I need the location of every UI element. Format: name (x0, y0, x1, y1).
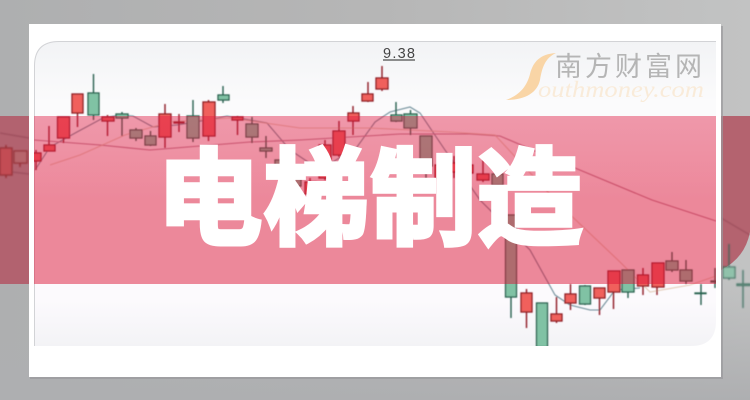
logo domain: outhmoney.com (538, 77, 704, 102)
outer left band segment (0, 116, 29, 284)
high price label: 9.38 (383, 46, 415, 62)
logo S swoosh (506, 53, 556, 100)
outer candles (0, 133, 750, 308)
watermark logo (506, 52, 705, 102)
pink title band (34, 116, 716, 284)
candlestick chart (30, 66, 716, 347)
outer right band segment (721, 116, 750, 270)
moving average lines (34, 107, 716, 310)
panel top and left edge (34, 42, 716, 346)
chart panel (34, 41, 716, 346)
title: 电梯制造 (157, 142, 582, 259)
logo chinese name: 南方财富网 (555, 52, 705, 82)
